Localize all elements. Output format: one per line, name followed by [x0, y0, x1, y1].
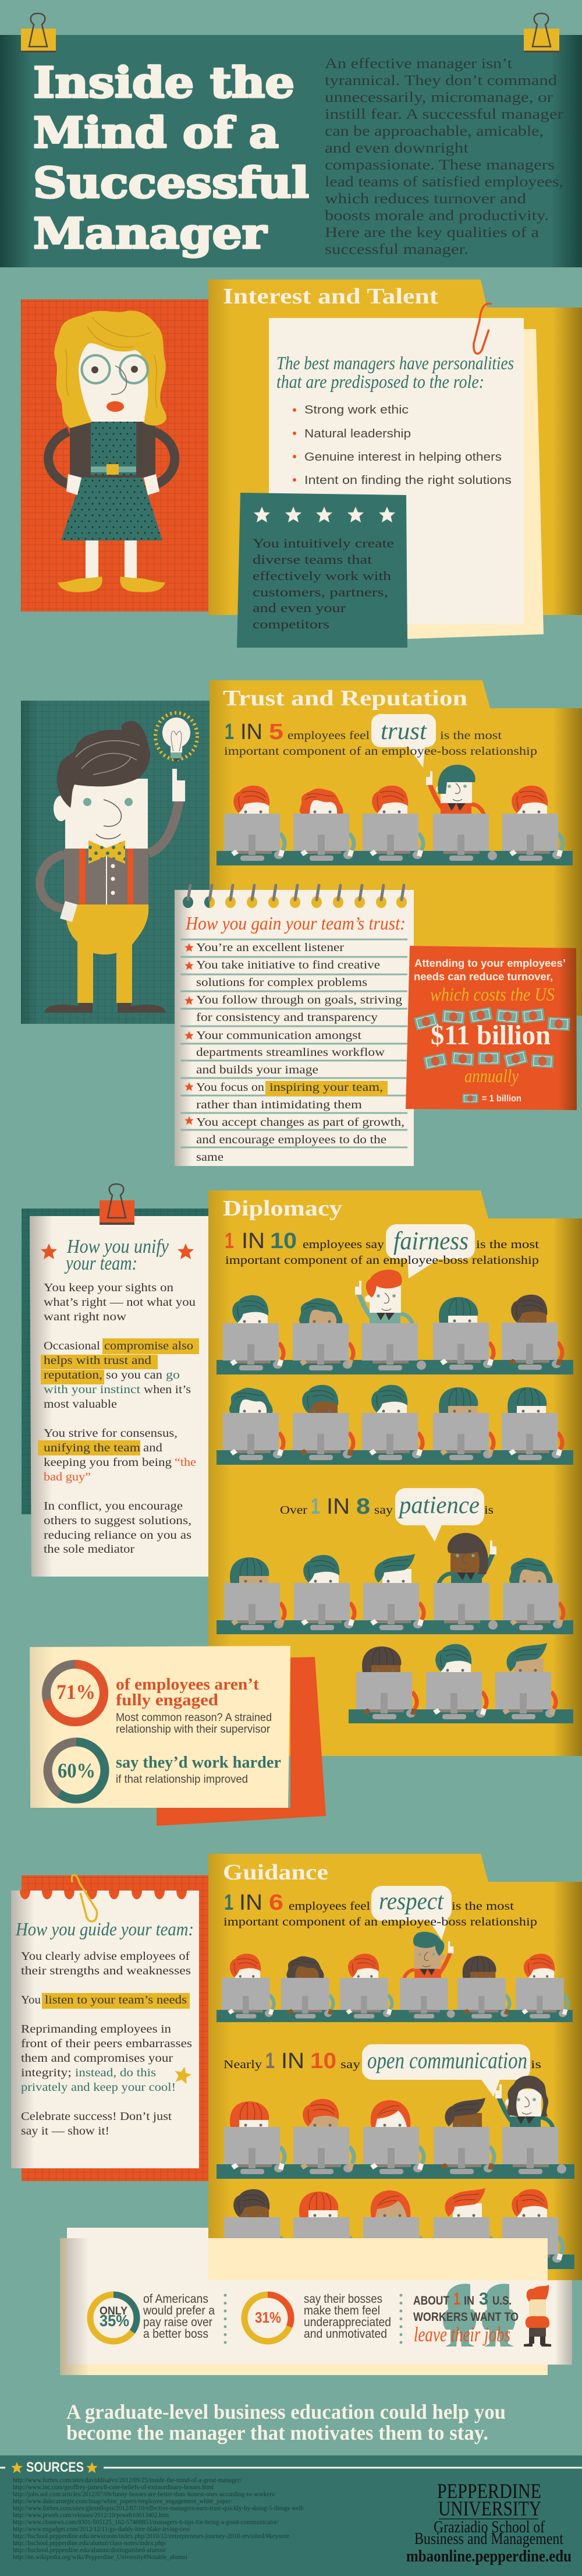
heading: diplomacy: Diplomacy [223, 1196, 342, 1221]
panel: orange grid backdrop [21, 299, 208, 612]
list text: same [196, 1151, 223, 1164]
intro text: can be approachable, amicable, [325, 123, 544, 139]
sources list: http://www.forbes.com/sites/daviddisalvo/2012/09/25/inside-the-mind-of-a-great-manager/ [13, 2477, 242, 2484]
statistic: over 1 in 8: IN [327, 1494, 350, 1519]
stat text: not engaged: relationship with their supervisor [116, 1723, 271, 1736]
desk row: five employees, trust [217, 765, 573, 865]
closing message: A graduate-level business education could help you [66, 2400, 506, 2423]
statistic: nearly 1 in 10: 1 [265, 2049, 275, 2073]
desk row: fairness row one [217, 1270, 573, 1374]
statistic: 1 in 5: 1 [225, 720, 234, 744]
stat text: one in three leave: ABOUT [413, 2294, 449, 2308]
icon: left binder clip [21, 13, 56, 52]
stat text: one in three leave: leave their jobs [414, 2323, 510, 2346]
statistic: over 1 in 8: 1 [311, 1494, 320, 1519]
logo: Pepperdine University: PEPPERDINE [437, 2479, 541, 2503]
sources heading: SOURCES [26, 2460, 84, 2475]
body text: go [166, 1369, 180, 1381]
body text: and [143, 1441, 162, 1454]
statistic: nearly 1 in 10: IN [281, 2049, 304, 2073]
intro text [325, 56, 564, 257]
frame: green backdrop [22, 1209, 208, 1514]
sources list: http://www.forbes.com/sites/glennllopis/2012/07/10/effective-managers-earn-trust-quickly-by-doing-5-things-well/ [13, 2505, 305, 2512]
speech bubble: respect: respect [379, 1888, 444, 1915]
statistic: 1 in 10: important component of an employee-boss relationship [225, 1254, 539, 1267]
body text: You strive for consensus, [44, 1427, 178, 1440]
statistic: nearly 1 in 10: 10 [310, 2049, 336, 2073]
statistic: over 1 in 8: say [374, 1504, 393, 1517]
statistic: nearly 1 in 10: is [531, 2058, 541, 2071]
donut chart: 35 percent [90, 2295, 137, 2341]
desk row: fairness row two [217, 1385, 573, 1465]
notepad: how you gain trust [175, 885, 414, 1166]
statistic: over 1 in 8: is [484, 1504, 494, 1517]
stat text: work harder [116, 1753, 281, 1786]
intro text: An effective manager isn’t [325, 56, 512, 72]
stat text: not engaged: of employees aren’t [116, 1675, 259, 1694]
list text: departments streamlines workflow [196, 1046, 385, 1059]
desk row: patience row one [217, 1533, 573, 1634]
list text: solutions for complex problems [196, 976, 367, 989]
panel: interest and talent [21, 280, 582, 648]
heading: guidance: Guidance [223, 1860, 328, 1885]
panel: trust and reputation [21, 680, 582, 1166]
script heading [276, 352, 514, 392]
sources list: http://www.engadget.com/2012/12/11/go-daddy-hire-blake-irving-ceo/ [13, 2526, 191, 2533]
statistic: nearly 1 in 10: Nearly [223, 2058, 262, 2071]
body text: want right now [44, 1310, 127, 1323]
body text: instead, do this [75, 2066, 156, 2079]
note text [253, 536, 394, 631]
title: Inside the [33, 58, 294, 107]
closing message [66, 2400, 506, 2444]
stat text: underappreciated: say their bosses [304, 2292, 382, 2306]
logo: Pepperdine University: Graziadio School of [434, 2518, 545, 2536]
icon: light bulb [155, 713, 197, 762]
note: how you unify your team [30, 1216, 208, 1577]
body text: keeping you from being [44, 1456, 172, 1469]
icon: right binder clip [524, 13, 559, 52]
illustration: unhappy worker [524, 2284, 551, 2347]
bills row [423, 1050, 554, 1070]
note text: effectively work with [253, 568, 391, 583]
donut chart: 31 percent [244, 2295, 291, 2341]
statistic: nearly 1 in 10 [223, 2049, 541, 2073]
list text: You focus on [196, 1081, 264, 1094]
stat text: one in three leave: IN [464, 2294, 474, 2308]
desk row: communication row two [217, 2188, 574, 2269]
body text: say it — show it! [21, 2125, 109, 2137]
statistic: 1 in 10 [225, 1229, 540, 1267]
statistic: over 1 in 8: Over [280, 1504, 307, 1517]
stat text: pay raise: of Americans [143, 2292, 208, 2306]
note: 11 billion turnover cost: annually [464, 1065, 519, 1086]
body text: when it’s [144, 1383, 191, 1396]
bullet list: Natural leadership [304, 427, 411, 440]
body text: front of their peers embarrasses [21, 2037, 192, 2050]
note text: competitors [253, 617, 329, 631]
bullet list [293, 404, 512, 487]
stat text: underappreciated: underappreciated [304, 2316, 391, 2329]
heading: interest and talent: Interest and Talent [223, 284, 438, 309]
speech bubble: open communication [362, 2044, 530, 2097]
body text: Reprimanding employees in [21, 2023, 171, 2036]
intro text: instill fear. A successful manager [325, 107, 564, 122]
statistic: 1 in 6: employees feel [289, 1900, 371, 1913]
note: 11 billion turnover cost: which costs the US [430, 984, 555, 1005]
body text: You keep your sights on [44, 1281, 173, 1294]
body text: so you can [106, 1369, 162, 1381]
statistic: nearly 1 in 10: say [340, 2058, 360, 2071]
speech bubble: fairness: fairness [393, 1227, 469, 1255]
stat text: one in three leave: WORKERS WANT TO [413, 2310, 519, 2324]
illustration: man with light bulb [40, 713, 197, 1013]
intro text: unnecessarily, micromanage, or [325, 90, 553, 105]
stat text: underappreciated [304, 2292, 391, 2341]
intro text: which reduces turnover and [325, 191, 527, 207]
footer [0, 2455, 582, 2576]
body text: most valuable [44, 1398, 117, 1411]
stat text: one in three leave: 1 [453, 2289, 460, 2309]
stars row [254, 507, 395, 522]
list text: Your communication amongst [196, 1029, 362, 1042]
statistic: over 1 in 8: 8 [356, 1494, 370, 1519]
body text: reducing reliance on you as [44, 1529, 191, 1542]
statistic: 1 in 10: 1 [225, 1229, 234, 1253]
desk row: patience row two [349, 1643, 573, 1723]
legend: = 1 billion [482, 1094, 521, 1104]
panel: green grid backdrop [21, 701, 210, 1024]
speech bubble: patience: patience [398, 1492, 480, 1519]
donut chart: 35 percent: ONLY [100, 2305, 127, 2317]
list text: and encourage employees to do the [196, 1133, 386, 1146]
list text: inspiring your team, [269, 1081, 383, 1094]
sources list: http://bschool.pepperdine.edu/alumni/class-notes/index.php/ [13, 2540, 167, 2547]
statistic: 1 in 5: 5 [269, 720, 283, 744]
stat text: not engaged [116, 1675, 272, 1736]
title [33, 58, 309, 258]
list text: for consistency and transparency [196, 1011, 378, 1024]
sources list [13, 2477, 305, 2561]
speech bubble: open communication: open communication [367, 2047, 527, 2073]
note text: customers, partners, [253, 585, 388, 599]
desk row: respect, six employees [217, 1932, 573, 2022]
logo: Pepperdine University [406, 2479, 572, 2566]
script heading: How you gain your team’s trust: [185, 913, 406, 934]
bills row [414, 1007, 570, 1031]
note text: You intuitively create [253, 536, 394, 550]
list text: rather than intimidating them [196, 1098, 363, 1111]
list text: You follow through on goals, striving [196, 994, 402, 1006]
statistic: 1 in 6: 6 [269, 1891, 283, 1915]
statistic: 1 in 10: 10 [270, 1229, 297, 1253]
bullet list: Strong work ethic [304, 404, 409, 416]
body text: integrity; [21, 2066, 72, 2079]
stars [184, 943, 194, 1125]
speech bubble: fairness [386, 1224, 475, 1278]
illustration: teal silhouettes [443, 2284, 515, 2347]
body text: bad guy” [44, 1471, 91, 1483]
intro text: and even downright [325, 140, 469, 156]
sources list: http://en.wikipedia.org/wiki/Pepperdine_University#Notable_alumni [13, 2554, 187, 2561]
stars [11, 2462, 98, 2473]
stat text: one in three leave: 3 [479, 2289, 488, 2309]
body text: what’s right — not what you [44, 1296, 196, 1309]
body text: Occasional [44, 1340, 100, 1352]
desk row: communication row one [217, 2076, 574, 2179]
note: 11 billion turnover cost: $11 billion [431, 1020, 551, 1051]
body text: privately and keep your cool! [21, 2081, 176, 2094]
stat text: work harder: if that relationship improved [116, 1773, 248, 1786]
speech bubble: trust: trust [381, 718, 427, 745]
stat text: pay raise: pay raise over [143, 2316, 212, 2329]
spiral rings [183, 885, 407, 908]
statistic: 1 in 10: is the most [476, 1238, 540, 1251]
donut chart: 60 percent [48, 1742, 105, 1799]
script heading: How you guide your team: [15, 1918, 194, 1939]
body text: Celebrate success! Don’t just [21, 2110, 172, 2123]
stat text: one in three leave [413, 2289, 519, 2346]
body text: You [21, 1994, 41, 2006]
bullet list: Genuine interest in helping others [304, 451, 502, 464]
intro text: boosts morale and productivity. [325, 208, 549, 224]
statistic: 1 in 6: important component of an employee-boss relationship [223, 1916, 537, 1928]
donut chart: 60 percent: 60% [58, 1759, 95, 1782]
body text: compromise also [104, 1340, 193, 1352]
note text: diverse teams that [253, 552, 372, 567]
donut chart: 71 percent: 71% [56, 1680, 95, 1704]
list text: You take initiative to find creative [196, 959, 380, 971]
intro text: tyrannical. They don’t command [325, 73, 558, 89]
note text: and even your [253, 600, 346, 615]
script heading: that are predisposed to the role: [276, 371, 484, 392]
body text: others to suggest solutions, [44, 1514, 191, 1527]
note: diverse teams [237, 493, 407, 648]
script heading: The best managers have personalities [276, 352, 514, 373]
intro text: lead teams of satisfied employees, [325, 174, 563, 190]
icon: red binder clip [100, 1184, 134, 1225]
statistic: 1 in 6: 1 [224, 1891, 233, 1915]
stat text: work harder: say they’d work harder [116, 1753, 281, 1772]
title: Mind of a [33, 108, 279, 157]
stat text: not engaged: fully engaged [116, 1691, 218, 1709]
icon: star [173, 2065, 193, 2084]
sources list: http://www.inc.com/geoffrey-james/8-core-beliefs-of-extraordinary-bosses.html [13, 2484, 214, 2491]
body text: the sole mediator [44, 1543, 134, 1556]
note text [414, 957, 566, 983]
body text: with your instinct [44, 1383, 141, 1396]
note: 11 billion turnover cost [406, 946, 577, 1110]
icon: yellow paperclip [72, 1875, 97, 1921]
statistic: 1 in 10: IN [242, 1229, 265, 1253]
donut chart: 31 percent: 31% [255, 2309, 281, 2326]
sources list: http://bschool.pepperdine.edu/alumni/distinguished-alumni/ [13, 2547, 167, 2554]
sources list: http://bschool.pepperdine.edu/newsroom/index.php/2010/12/entrepreneurs-journey-2010-revisited/#keynote [13, 2533, 289, 2540]
logo: Pepperdine University: UNIVERSITY [438, 2497, 541, 2520]
speech bubble: trust [371, 714, 436, 768]
body text: “the [175, 1456, 196, 1469]
stat text: one in three leave: U.S. [492, 2294, 512, 2308]
stat text: pay raise [143, 2292, 215, 2341]
heading: trust and reputation: Trust and Reputation [223, 686, 467, 711]
bullet list: Intent on finding the right solutions [304, 474, 512, 487]
statistic: 1 in 5: employees feel [288, 729, 370, 742]
closing message: become the manager that motivates them to stay. [66, 2421, 488, 2444]
donut chart: 35 percent: 35% [100, 2312, 129, 2330]
statistic: 1 in 6 [223, 1891, 537, 1928]
body text: their strengths and weaknesses [21, 1964, 191, 1977]
script heading: your team: [65, 1253, 137, 1274]
sources list: http://www.cbsnews.com/8301-505125_162-57488853/managers-6-tips-for-being-a-good-communicator/ [13, 2519, 279, 2526]
body text: In conflict, you encourage [44, 1500, 183, 1513]
title: Manager [33, 209, 267, 258]
illustration: woman manager [48, 310, 175, 592]
stars [41, 1243, 194, 1259]
title: Successful [33, 158, 309, 207]
stat text: not engaged: Most common reason? A strained [116, 1712, 272, 1724]
stat text: underappreciated: make them feel [304, 2304, 380, 2317]
note paper back [407, 329, 544, 639]
legend [463, 1094, 521, 1104]
intro text: successful manager. [325, 242, 469, 257]
statistic: 1 in 5: is the most [440, 729, 502, 742]
stat text: pay raise: a better boss [143, 2327, 208, 2341]
speech bubble: respect [371, 1886, 452, 1939]
statistic: 1 in 10: employees say [303, 1238, 384, 1251]
body text [44, 1281, 196, 1556]
note: how you guide your team [11, 1875, 199, 2168]
note: traits list [269, 318, 524, 624]
statistic: 1 in 6: IN [239, 1891, 262, 1915]
script heading [65, 1236, 169, 1274]
list text: You’re an excellent listener [196, 941, 344, 954]
body text: unifying the team [44, 1441, 141, 1454]
donut chart: 71 percent [47, 1665, 104, 1722]
intro text: compassionate. These managers [325, 157, 555, 173]
body text: You clearly advise employees of [21, 1950, 190, 1963]
statistic: 1 in 5: important component of an employee-boss relationship [224, 745, 537, 758]
stat text: underappreciated: and unmotivated [304, 2327, 387, 2341]
statistic: 1 in 5: IN [240, 720, 262, 744]
intro text: Here are the key qualities of a [325, 225, 539, 241]
statistic: over 1 in 8 [280, 1494, 494, 1519]
panel: guidance [11, 1854, 582, 2280]
body text: them and compromises your [21, 2052, 173, 2065]
note: bottom statistics [60, 2228, 572, 2375]
statistic: 1 in 5 [224, 720, 537, 758]
body text: listen to your team’s needs [45, 1994, 187, 2006]
body text [21, 1950, 192, 2137]
panel: diplomacy [22, 1184, 582, 1756]
note text: needs can reduce turnover, [414, 971, 553, 983]
body text: reputation, [44, 1369, 102, 1381]
note: engagement stats [30, 1646, 326, 1826]
speech bubble: patience [395, 1488, 484, 1542]
frame: orange backdrop [22, 1875, 208, 2181]
header banner [0, 13, 582, 267]
sources list: http://www.dalecarnegie.com/imap/white_papers/employee_engagement_white_paper/ [13, 2498, 233, 2505]
statistic: 1 in 6: is the most [452, 1900, 514, 1913]
icon: paperclip [474, 303, 492, 354]
sources list: http://jobs.aol.com/articles/2012/07/09/funny-bosses-are-better-than-honest-ones-according-to-workers/ [13, 2491, 276, 2498]
stat text: pay raise: would prefer a [143, 2304, 215, 2317]
script heading: How you unify [66, 1236, 169, 1257]
body text: helps with trust and [44, 1354, 151, 1367]
note text: Attending to your employees’ [414, 957, 566, 969]
list text: You accept changes as part of growth, [196, 1116, 404, 1129]
list text: and builds your image [196, 1063, 318, 1076]
list text [196, 941, 404, 1164]
sources list: http://www.prweb.com/releases/2012/10/prweb10013402.htm [13, 2512, 169, 2519]
